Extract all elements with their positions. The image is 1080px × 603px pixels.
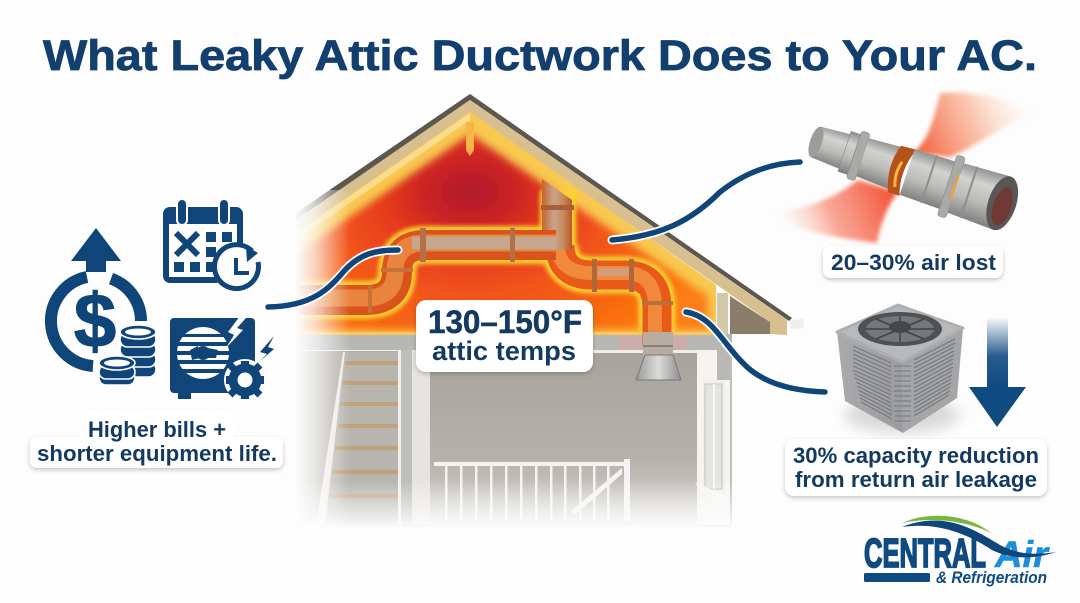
house cutaway illustration bbox=[290, 94, 804, 540]
callout line: left icons to attic duct bbox=[268, 250, 398, 307]
down arrow: capacity reduction bbox=[969, 317, 1026, 427]
title: What Leaky Attic Ductwork Does to Your AC. bbox=[43, 32, 1037, 80]
icon: rising dollar cost: $ bbox=[74, 279, 116, 364]
label: higher bills: Higher bills + bbox=[88, 417, 226, 442]
duct branch left bbox=[300, 228, 556, 313]
duct vertical riser bbox=[541, 179, 574, 250]
ceiling diffuser bbox=[636, 355, 681, 380]
logo: Central Air and Refrigeration: Air bbox=[994, 534, 1051, 575]
icon: coin stacks bbox=[99, 325, 156, 385]
label: capacity reduction bbox=[785, 439, 1047, 496]
label: capacity reduction: from return air leakage bbox=[795, 467, 1037, 492]
hot air plumes bbox=[770, 92, 1037, 243]
label: air lost: 20–30% air lost bbox=[831, 250, 997, 275]
callout line: attic to leaking duct bbox=[612, 162, 800, 240]
logo: Central Air and Refrigeration bbox=[864, 516, 1056, 587]
outdoor AC condenser unit bbox=[837, 305, 963, 433]
leaking duct illustration bbox=[770, 92, 1037, 243]
attic temperature label: 130–150°F bbox=[428, 304, 582, 340]
ceiling band bbox=[296, 334, 732, 350]
roof shingles and fascia bbox=[296, 94, 804, 335]
lower floor walls bbox=[296, 334, 732, 527]
label: higher bills bbox=[30, 413, 283, 468]
white fade edges bbox=[290, 190, 750, 540]
fan grille bbox=[858, 312, 942, 346]
callout line: attic to AC unit bbox=[686, 312, 825, 392]
metal duct bbox=[800, 110, 1025, 238]
condenser fins bbox=[853, 339, 955, 421]
attic heat glow bbox=[296, 112, 716, 335]
window bbox=[695, 380, 730, 503]
ductwork with hot glow bbox=[300, 179, 681, 380]
logo: Central Air and Refrigeration: & Refrigeration bbox=[936, 568, 1047, 587]
icon: damaged AC unit with gear bbox=[170, 316, 274, 401]
label: air lost bbox=[823, 246, 1003, 278]
attic temperature label: attic temps bbox=[432, 336, 576, 366]
icon: calendar with clock bbox=[163, 199, 262, 294]
duct glow bbox=[300, 190, 657, 332]
icons: cost and wear bbox=[51, 199, 274, 401]
label: higher bills: shorter equipment life. bbox=[37, 441, 277, 466]
logo wordmark: CENTRAL bbox=[864, 530, 986, 576]
label: capacity reduction: 30% capacity reduction bbox=[793, 443, 1039, 468]
duct branch right bbox=[558, 245, 673, 356]
attic temperature label bbox=[416, 300, 593, 372]
railing bbox=[434, 459, 630, 521]
logo swoosh bbox=[902, 516, 1056, 557]
staircase bbox=[316, 352, 398, 525]
icon: rising dollar cost bbox=[51, 228, 141, 366]
